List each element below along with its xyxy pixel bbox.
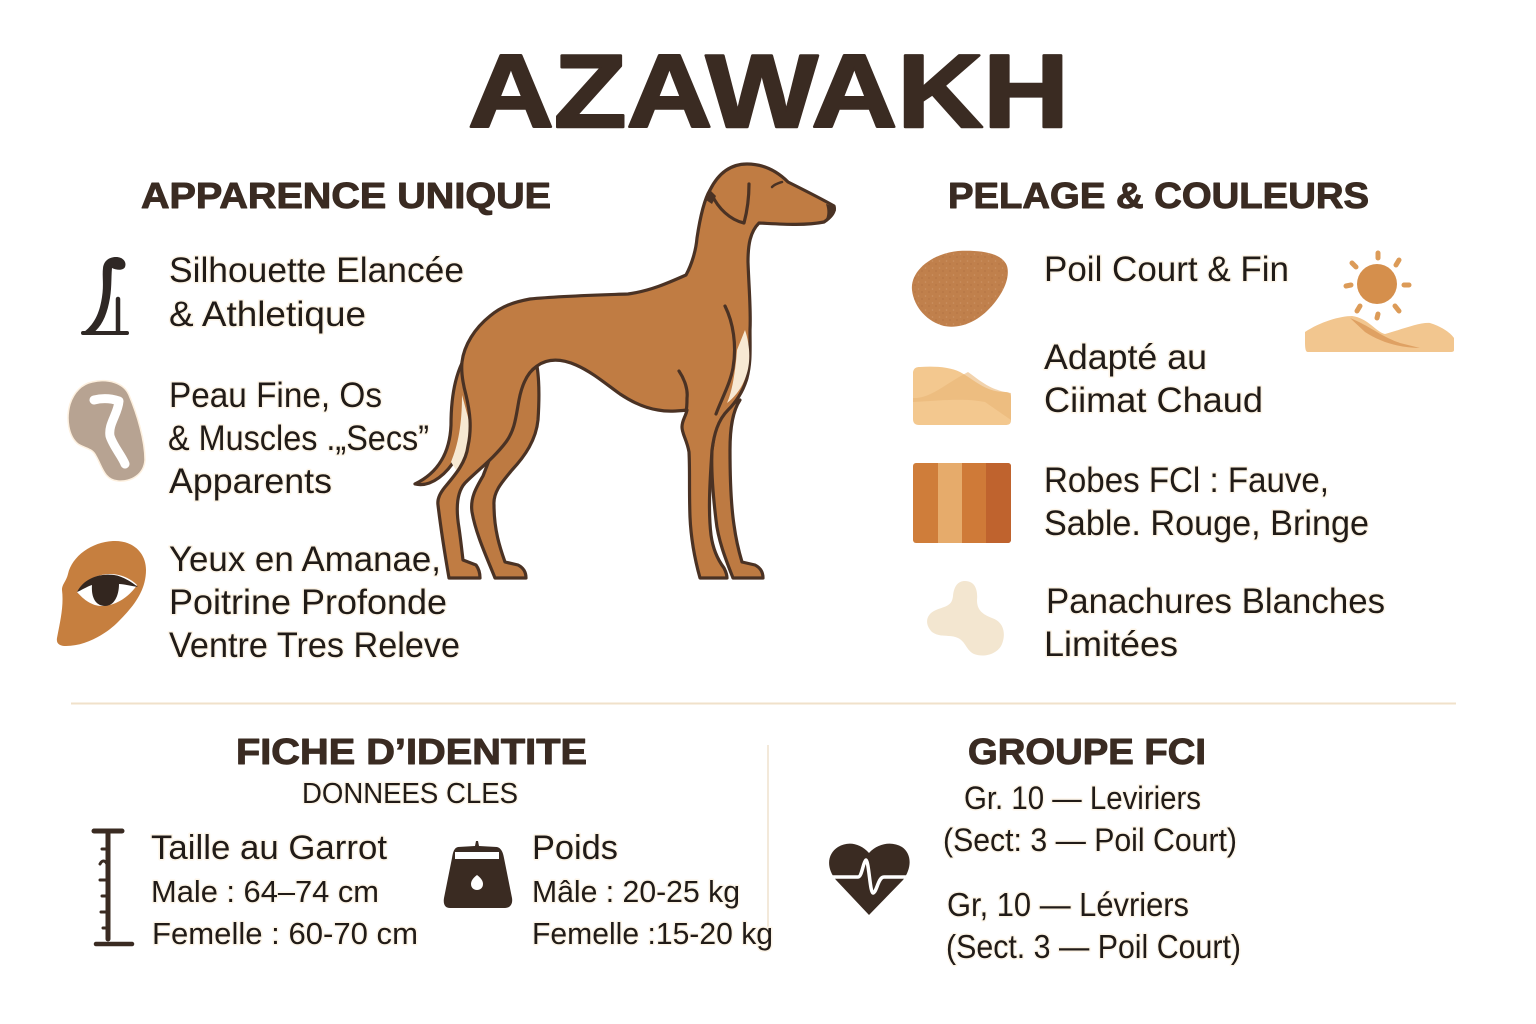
text: groupe lines two [946, 886, 1241, 965]
text: climat [1044, 338, 1263, 420]
text: silhouette [169, 251, 464, 334]
text: poids [532, 829, 773, 951]
text: groupe lines one: Gr. 10 — Leviriers [964, 780, 1201, 816]
icon: silhouette [83, 257, 127, 333]
title: AZAWAKH [468, 34, 1069, 150]
text: robes: Robes FCl : Fauve, [1044, 461, 1329, 500]
heading: groupe: GROUPE FCI [968, 731, 1206, 772]
text: groupe lines two: (Sect. 3 — Poil Court) [946, 928, 1241, 965]
panel: groupe fci [826, 731, 1241, 965]
icon: white markings [927, 581, 1004, 656]
far hind leg [472, 366, 539, 578]
nose [825, 204, 836, 221]
dog details [679, 182, 782, 414]
text: skin: Peau Fine, Os [169, 376, 382, 415]
text: eyes: Ventre Tres Releve [169, 626, 460, 665]
text: taille: Male : 64–74 cm [151, 874, 379, 909]
panel: pelage et couleurs [912, 175, 1454, 664]
text: climat: Ciimat Chaud [1044, 381, 1263, 420]
body and near legs [438, 164, 834, 578]
text: eyes: Yeux en Amanae, [169, 540, 441, 579]
text: silhouette: & Athletique [169, 295, 366, 334]
text: groupe lines one [943, 780, 1237, 858]
icon: heart with pulse [826, 844, 912, 915]
text: taille: Femelle : 60-70 cm [152, 916, 418, 951]
text: groupe lines two: Gr, 10 — Lévriers [947, 886, 1189, 923]
dog illustration [415, 164, 836, 578]
subheading: donnees cles: DONNEES CLES [302, 778, 518, 810]
cream chest patch [727, 330, 749, 403]
icon: skin and bone [68, 381, 145, 481]
text: eyes [169, 540, 460, 665]
text: climat: Adapté au [1044, 338, 1207, 377]
text: poil: Poil Court & Fin [1044, 250, 1289, 289]
ear shadow [706, 190, 716, 204]
text: panachures [1044, 582, 1385, 664]
panel: apparence unique [57, 175, 551, 665]
text: panachures: Limitées [1044, 625, 1178, 664]
text: poids: Femelle :15-20 kg [532, 916, 773, 951]
icon: height ruler [94, 831, 132, 944]
text: eyes: Poitrine Profonde [169, 583, 447, 622]
text: skin: Apparents [169, 462, 332, 501]
text: taille: Taille au Garrot [151, 829, 388, 867]
text: taille [151, 829, 418, 951]
icon: desert dune [913, 367, 1011, 425]
icon: weight [444, 841, 512, 908]
text: poids: Poids [532, 829, 618, 867]
heading: pelage: PELAGE & COULEURS [948, 175, 1369, 216]
text: skin: & Muscles .„Secs” [168, 419, 429, 458]
far front leg [712, 400, 763, 578]
heading: apparence unique: APPARENCE UNIQUE [141, 175, 551, 216]
icon: fur swatch [912, 251, 1008, 327]
panel: fiche d'identite [94, 731, 773, 951]
icon: sun over dunes [1305, 253, 1454, 352]
heading: fiche: FICHE D’IDENTITE [236, 731, 587, 772]
text: robes [1044, 461, 1369, 543]
text: robes: Sable. Rouge, Bringe [1044, 504, 1369, 543]
tail [415, 363, 470, 485]
text: panachures: Panachures Blanches [1046, 582, 1385, 621]
text: silhouette: Silhouette Elancée [169, 251, 464, 290]
text: poids: Mâle : 20-25 kg [532, 874, 740, 909]
icon: almond eye [57, 541, 146, 646]
icon: colour stripes [913, 463, 1011, 543]
text: skin [168, 376, 429, 501]
text: groupe lines one: (Sect: 3 — Poil Court) [943, 822, 1237, 858]
